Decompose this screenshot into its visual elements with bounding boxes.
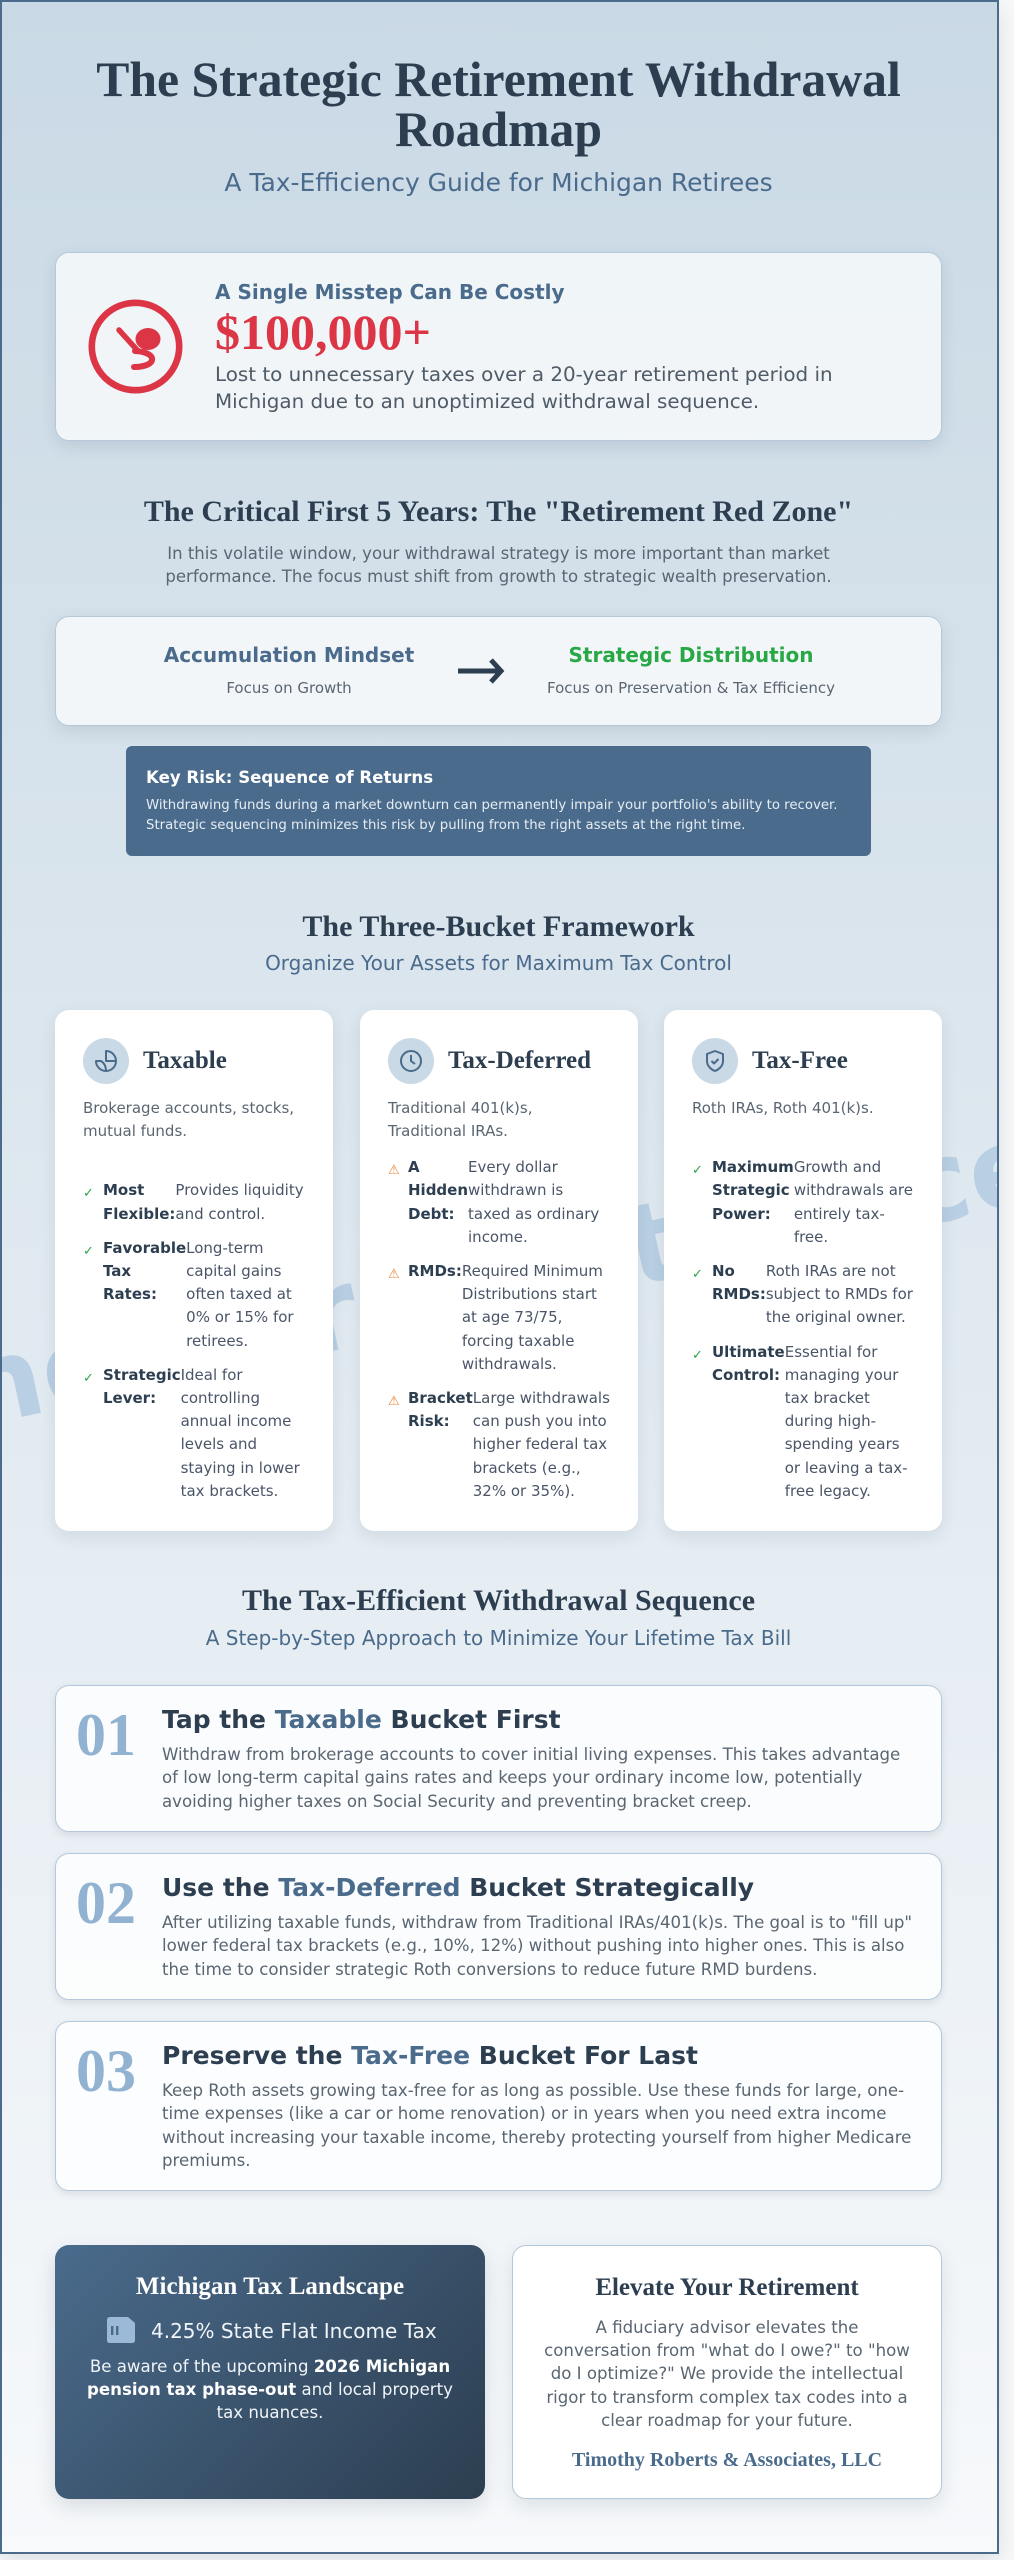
panel: tax-deferred: ⚠ — [388, 1163, 400, 1178]
step 1: 01 — [76, 1702, 136, 1768]
step 3: 03 — [76, 2038, 136, 2104]
callout: key risk: Withdrawing funds during a market downturn can permanently impair your portfolio's ability to recover. — [146, 798, 838, 813]
panel: mindset shift — [55, 616, 942, 726]
accumulation mindset — [164, 643, 414, 697]
panel: taxable: ✓ — [83, 1186, 94, 1201]
step 1 — [55, 1685, 942, 1832]
step 2: Use the Tax-Deferred Bucket Strategically — [162, 1873, 754, 1902]
callout: key risk: Strategic sequencing minimizes this risk by pulling from the right assets at the right time. — [146, 818, 745, 833]
icon: tax chip — [107, 2317, 135, 2343]
step 2: After utilizing taxable funds, withdraw from Traditional IRAs/401(k)s. The goal is to "fill up" — [162, 1913, 912, 1932]
panel: tax-free: No RMDs: — [712, 1262, 766, 1303]
panel: tax-free: Tax-Free — [752, 1047, 848, 1074]
three buckets subtitle: Organize Your Assets for Maximum Tax Control — [265, 951, 732, 975]
panel: tax-free — [664, 1010, 942, 1531]
panel: elevate your retirement: Timothy Roberts & Associates, LLC — [572, 2449, 882, 2471]
panel: tax-free: Roth IRAs are not subject to RMDs for the original owner. — [766, 1262, 913, 1326]
panel: tax-free: Maximum Strategic Power: — [712, 1158, 794, 1223]
watermark: r — [289, 1243, 370, 1382]
step 1: avoiding higher taxes on Social Security and preventing bracket creep. — [162, 1792, 752, 1811]
panel: tax-deferred: Traditional 401(k)s, — [388, 1099, 532, 1117]
step 3: Keep Roth assets growing tax-free for as long as possible. Use these funds for large, one- — [162, 2081, 904, 2100]
panel: tax-deferred: A Hidden Debt: — [408, 1158, 468, 1223]
panel: tax-deferred: Bracket Risk: — [408, 1389, 473, 1430]
panel: tax-free: ✓ — [692, 1267, 703, 1282]
panel: taxable: Favorable Tax Rates: — [103, 1239, 186, 1303]
panel: taxable: Ideal for controlling annual income levels and staying in lower tax brackets. — [181, 1366, 300, 1500]
step 3 — [55, 2021, 942, 2191]
watermark: t — [613, 1175, 693, 1313]
strategic distribution: Focus on Preservation & Tax Efficiency — [547, 679, 835, 697]
panel: tax-deferred: Required Minimum Distributions start at age 73/75, forcing taxable withdrawals. — [462, 1262, 603, 1373]
panel: elevate your retirement: conversation from "what do I owe?" to "how — [544, 2341, 910, 2360]
panel: taxable: Long-term capital gains often taxed at 0% or 15% for retirees. — [186, 1239, 294, 1350]
red zone intro text: performance. The focus must shift from growth to strategic wealth preservation. — [165, 567, 832, 586]
misstep text — [215, 280, 833, 412]
icon: clock — [388, 1038, 434, 1084]
panel: elevate your retirement: clear roadmap for your future. — [601, 2411, 853, 2430]
title — [96, 52, 901, 157]
panel: taxable: Strategic Lever: — [103, 1366, 181, 1407]
panel: elevate your retirement: A fiduciary advisor elevates the — [596, 2318, 858, 2337]
title: The Strategic Retirement Withdrawal — [96, 52, 901, 107]
panel: tax-deferred: Every dollar withdrawn is taxed as ordinary income. — [468, 1158, 599, 1246]
panel: tax-free: Growth and withdrawals are entirely tax-free. — [794, 1158, 913, 1246]
panel: elevate your retirement: do I optimize?" We provide the intellectual — [551, 2364, 903, 2383]
misstep text: Michigan due to an unoptimized withdrawal sequence. — [215, 390, 759, 412]
step 1: Withdraw from brokerage accounts to cover initial living expenses. This takes advantage — [162, 1745, 900, 1764]
heading: three buckets: The Three-Bucket Framework — [302, 910, 695, 943]
panel: taxable — [55, 1010, 333, 1531]
icon: crossed-out money — [88, 300, 182, 394]
panel: michigan tax landscape: tax nuances. — [217, 2403, 323, 2422]
panel: tax-deferred: Tax-Deferred — [448, 1047, 591, 1074]
icon: pie chart — [83, 1038, 129, 1084]
panel: taxable: ✓ — [83, 1244, 94, 1259]
panel: tax-free: Essential for managing your tax bracket during high-spending years or leaving a tax-free legacy. — [785, 1343, 908, 1500]
panel: elevate your retirement — [512, 2245, 942, 2499]
panel: taxable: ✓ — [83, 1371, 94, 1386]
strategic distribution — [547, 643, 835, 697]
panel: tax-deferred — [360, 1010, 638, 1531]
step 3: Preserve the Tax-Free Bucket For Last — [162, 2041, 698, 2070]
callout: key risk: Key Risk: Sequence of Returns — [146, 768, 433, 787]
panel: tax-deferred: Traditional IRAs. — [388, 1122, 508, 1140]
callout: key risk — [126, 746, 871, 856]
panel: elevate your retirement: rigor to transform complex tax codes into a — [546, 2388, 908, 2407]
panel: taxable: Provides liquidity and control. — [175, 1181, 304, 1223]
panel: michigan tax landscape: 4.25% State Flat Income Tax — [151, 2319, 437, 2343]
panel: michigan tax landscape: pension tax phase-out and local property — [87, 2380, 453, 2399]
panel: michigan tax landscape: Michigan Tax Landscape — [136, 2273, 404, 2300]
red zone intro text — [165, 544, 832, 586]
panel: taxable: Taxable — [143, 1047, 227, 1074]
panel: tax-free: ✓ — [692, 1348, 703, 1363]
panel: costly misstep — [55, 252, 942, 441]
panel: taxable: Most Flexible: — [103, 1181, 175, 1223]
panel: tax-deferred: Large withdrawals can push you into higher federal tax brackets (e.g., 32% or 35%). — [473, 1389, 610, 1500]
step 2 — [55, 1853, 942, 2000]
strategic distribution: Strategic Distribution — [568, 643, 814, 667]
heading: red zone: The Critical First 5 Years: The "Retirement Red Zone" — [144, 495, 853, 528]
subtitle: A Tax-Efficiency Guide for Michigan Retirees — [224, 168, 773, 197]
step 3: premiums. — [162, 2151, 251, 2170]
panel: tax-free: Roth IRAs, Roth 401(k)s. — [692, 1099, 874, 1117]
accumulation mindset: Accumulation Mindset — [164, 643, 414, 667]
misstep text: A Single Misstep Can Be Costly — [215, 280, 565, 304]
panel: tax-deferred: ⚠ — [388, 1267, 400, 1282]
step 2: lower federal tax brackets (e.g., 10%, 12%) without pushing into higher ones. This is also — [162, 1936, 904, 1955]
panel: taxable: Brokerage accounts, stocks, mutual funds. — [83, 1099, 294, 1140]
panel: tax-free: ✓ — [692, 1163, 703, 1178]
step 1: of low long-term capital gains rates and keeps your ordinary income low, potentially — [162, 1768, 862, 1787]
panel: tax-deferred: ⚠ — [388, 1394, 400, 1409]
step 1: Tap the Taxable Bucket First — [162, 1705, 561, 1734]
panel: michigan tax landscape — [55, 2245, 485, 2499]
heading: withdrawal sequence: The Tax-Efficient Withdrawal Sequence — [242, 1584, 755, 1617]
icon: shield check — [692, 1038, 738, 1084]
red zone intro text: In this volatile window, your withdrawal strategy is more important than market — [167, 544, 830, 563]
step 3: time expenses (like a car or home renovation) or in years when you need extra income — [162, 2104, 886, 2123]
misstep text: $100,000+ — [215, 304, 431, 360]
panel: tax-free: Ultimate Control: — [712, 1343, 785, 1384]
panel: michigan tax landscape: Be aware of the upcoming 2026 Michigan — [90, 2357, 450, 2376]
step 3: without increasing your taxable income, thereby protecting yourself from higher Medicare — [162, 2128, 911, 2147]
panel: tax-deferred: RMDs: — [408, 1262, 462, 1280]
accumulation mindset: Focus on Growth — [226, 679, 352, 697]
arrow — [458, 658, 504, 684]
step 2: 02 — [76, 1870, 136, 1936]
misstep text: Lost to unnecessary taxes over a 20-year retirement period in — [215, 363, 833, 386]
step 2: the time to consider strategic Roth conversions to reduce future RMD burdens. — [162, 1960, 817, 1979]
title: Roadmap — [395, 102, 602, 157]
panel: elevate your retirement: Elevate Your Retirement — [595, 2274, 859, 2301]
withdrawal sequence subtitle: A Step-by-Step Approach to Minimize Your Lifetime Tax Bill — [206, 1626, 791, 1650]
